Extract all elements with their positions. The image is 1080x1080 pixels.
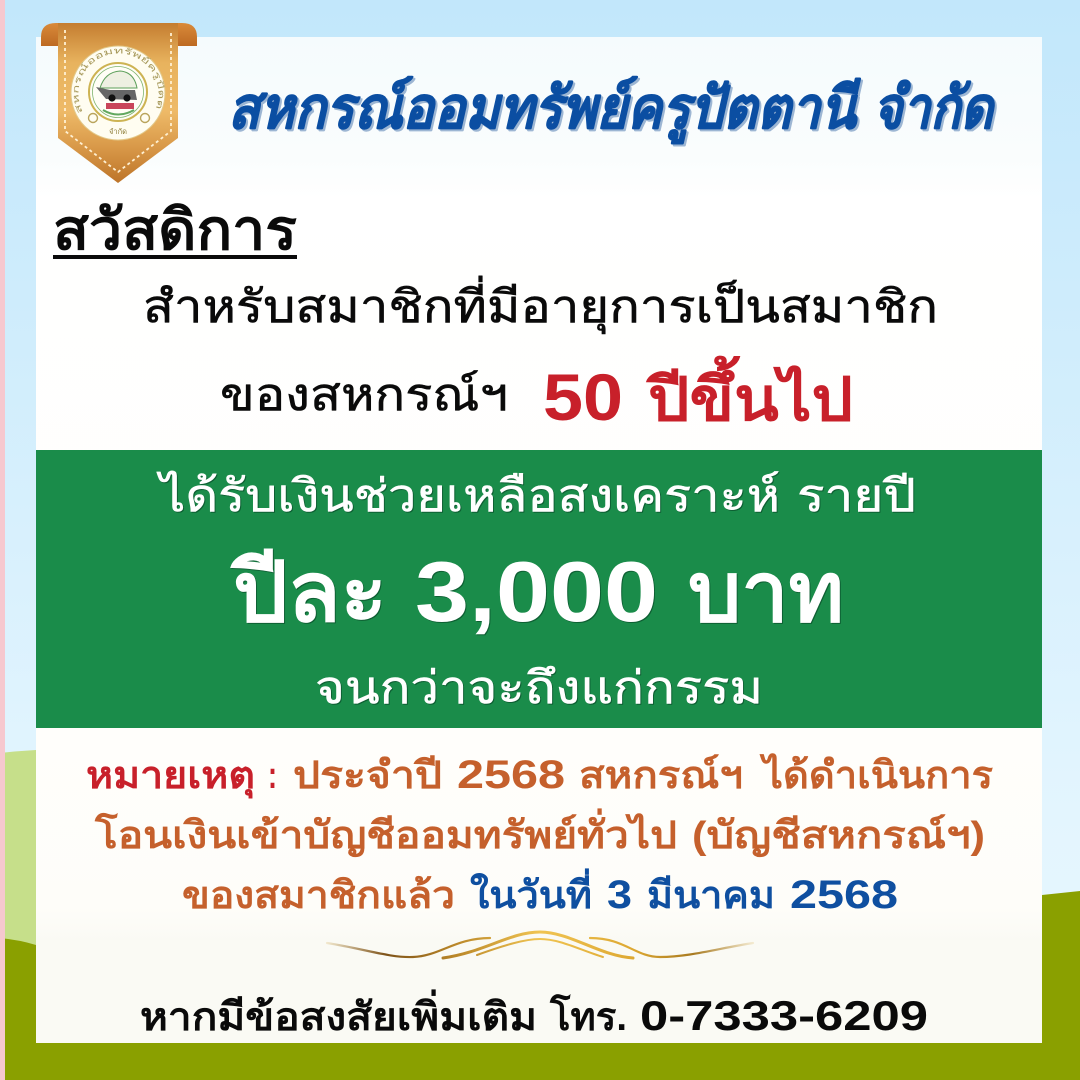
note line 3: 2568 xyxy=(790,873,898,917)
background: dark green ground xyxy=(0,891,1080,1080)
logo cannon xyxy=(96,87,137,100)
note line 1: ประจำปี xyxy=(293,755,442,797)
benefit amount: ปีละ xyxy=(230,545,387,639)
note line 2 xyxy=(94,808,985,857)
logo seal xyxy=(70,46,166,140)
note line 3: 3 xyxy=(607,873,632,917)
title: จำกัด xyxy=(873,76,996,141)
contact line: โทร. xyxy=(549,994,627,1039)
ribbon fold xyxy=(41,23,197,46)
title: สหกรณ์ออมทรัพย์ครูปัตตานี xyxy=(228,76,862,145)
highlight: 50 years: 50 xyxy=(543,360,623,434)
note line 3 xyxy=(182,868,898,917)
note line 1: สหกรณ์ฯ xyxy=(579,754,743,797)
ribbon body xyxy=(58,23,178,183)
background: pink edge strip xyxy=(0,0,5,1080)
benefit amount: บาท xyxy=(688,545,844,639)
contact line: 0-7333-6209 xyxy=(640,992,928,1039)
note line 1: : xyxy=(268,755,277,797)
ribbon stitching xyxy=(65,30,171,172)
note text block xyxy=(86,753,994,917)
benefit heading: ได้รับเงินช่วยเหลือสงเคราะห์ xyxy=(157,470,780,521)
contact line xyxy=(140,989,928,1039)
note line 2: โอนเงินเข้าบัญชีออมทรัพย์ทั่วไป xyxy=(94,808,677,857)
note line 1: 2568 xyxy=(457,753,565,797)
benefit amount: 3,000 xyxy=(415,545,658,640)
benefit amount xyxy=(230,545,844,640)
gold flourish xyxy=(327,932,753,958)
eligibility line 2: ของสหกรณ์ฯ xyxy=(220,369,508,420)
eligibility line 1: สำหรับสมาชิกที่มีอายุการเป็นสมาชิก xyxy=(143,275,938,334)
note line 2: (บัญชีสหกรณ์ฯ) xyxy=(692,814,985,857)
highlight: 50 years: ปีขึ้นไป xyxy=(645,355,853,433)
ribbon badge with logo xyxy=(41,23,197,183)
note line 3: ในวันที่ xyxy=(470,868,592,917)
benefit duration: จนกว่าจะถึงแก่กรรม xyxy=(315,662,763,713)
benefit heading: รายปี xyxy=(797,470,916,521)
panel: green benefit band xyxy=(36,450,1042,728)
note line 1 xyxy=(86,753,994,799)
heading: welfare: สวัสดิการ xyxy=(53,198,297,261)
logo seal: จำกัด xyxy=(109,127,127,136)
note line 1: ได้ดำเนินการ xyxy=(759,753,994,797)
background: light green hill xyxy=(0,750,36,950)
highlight: 50 years xyxy=(543,355,853,434)
contact line: หากมีข้อสงสัยเพิ่มเติม xyxy=(140,989,537,1039)
note line 1: หมายเหตุ xyxy=(86,755,255,799)
note line 3: มีนาคม xyxy=(647,875,775,917)
note line 3: ของสมาชิกแล้ว xyxy=(182,875,455,917)
